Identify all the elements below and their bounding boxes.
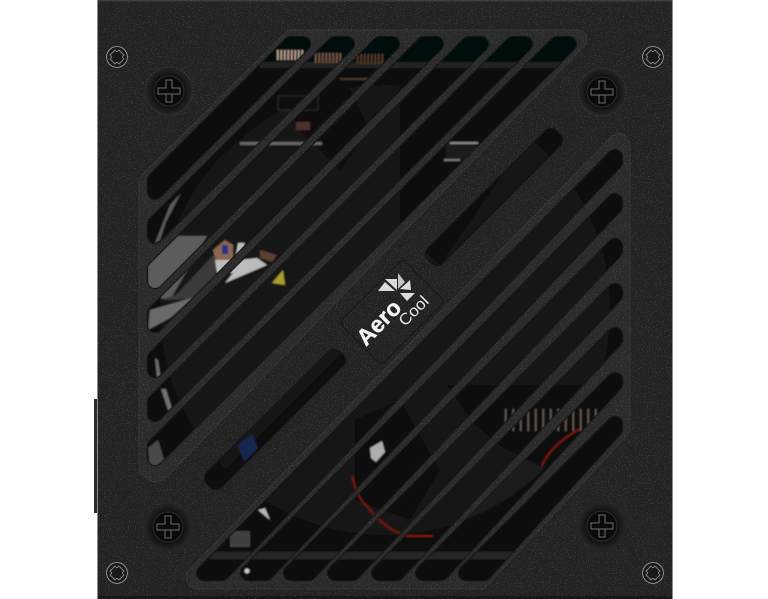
fan interior seen through grille slots bbox=[148, 37, 610, 575]
embossed grille outline: lower right bbox=[186, 133, 630, 589]
slot rims bbox=[155, 44, 615, 573]
yellow component bbox=[272, 270, 285, 285]
bottom horizontal bar bbox=[210, 552, 520, 559]
top horizontal bar bbox=[260, 62, 570, 68]
silver component bbox=[370, 441, 385, 462]
dark upper-left wedge bbox=[220, 123, 260, 158]
blue cable bbox=[238, 434, 258, 462]
bright component left bbox=[215, 243, 267, 283]
dark blade lower left bbox=[230, 531, 250, 547]
light lines at centre right bbox=[446, 144, 476, 159]
inner dark area lower centre bbox=[355, 400, 440, 520]
screw: small bottom right bbox=[643, 563, 663, 583]
screw: small bottom left bbox=[107, 563, 127, 583]
screw: small top right bbox=[643, 47, 663, 67]
dark area behind lower capsule bbox=[226, 354, 345, 475]
logo: AeroCool bbox=[351, 273, 433, 350]
embossed grille outline: upper left bbox=[139, 30, 587, 482]
panel: power supply face bbox=[97, 0, 673, 599]
dark top band behind the slots bbox=[264, 37, 576, 62]
dark centre wedge bbox=[288, 88, 366, 170]
dark right upper wedge bbox=[400, 86, 503, 264]
logo plate outline bbox=[339, 259, 445, 365]
logo wordmark: Aero: Aero bbox=[351, 294, 406, 350]
screw: small top left bbox=[107, 47, 127, 67]
screw: large top left bbox=[145, 67, 193, 115]
grey blade left bbox=[148, 236, 207, 300]
side tab on power supply bbox=[94, 399, 98, 513]
screw: large bottom right bbox=[578, 502, 626, 550]
copper fins top bbox=[277, 55, 383, 59]
dark heatsink area lower right bbox=[448, 385, 596, 468]
red wires bbox=[352, 476, 433, 536]
screw: large bottom left bbox=[144, 503, 192, 551]
copper heatsink fins bbox=[505, 409, 602, 431]
screw: large top right bbox=[578, 68, 626, 116]
grey component outlines upper bbox=[278, 96, 318, 110]
logo wordmark: Cool: Cool bbox=[396, 293, 433, 330]
surface speckle texture bbox=[98, 0, 672, 599]
logo emblem triangles bbox=[378, 273, 415, 301]
